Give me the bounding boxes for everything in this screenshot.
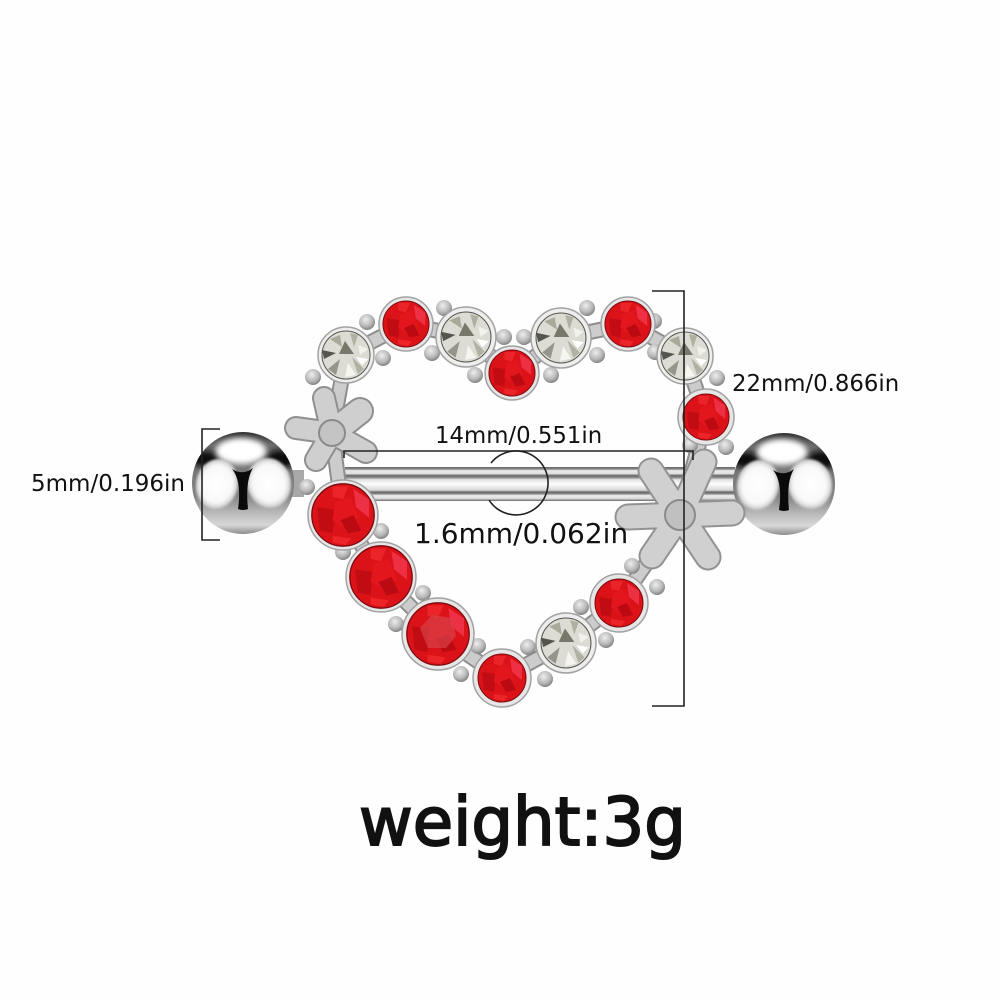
- red gems: [308, 297, 734, 707]
- left flower: [296, 398, 366, 460]
- product diagram: [32, 290, 898, 860]
- right ball: [732, 433, 837, 535]
- right flower: [628, 462, 732, 557]
- barbell shaft: [292, 467, 735, 501]
- dimension lines: [202, 291, 693, 706]
- heart frame: [332, 324, 706, 678]
- left ball: [191, 432, 296, 534]
- label: height: 22mm/0.866in: [732, 371, 899, 397]
- label: ball size: 5mm/0.196in: [31, 471, 185, 497]
- label: length: 14mm/0.551in: [435, 423, 602, 449]
- clear gems: [318, 307, 713, 673]
- heart beads: [299, 300, 734, 687]
- label: gauge: 1.6mm/0.062in: [414, 517, 628, 550]
- weight title: weight:3g: [359, 783, 686, 861]
